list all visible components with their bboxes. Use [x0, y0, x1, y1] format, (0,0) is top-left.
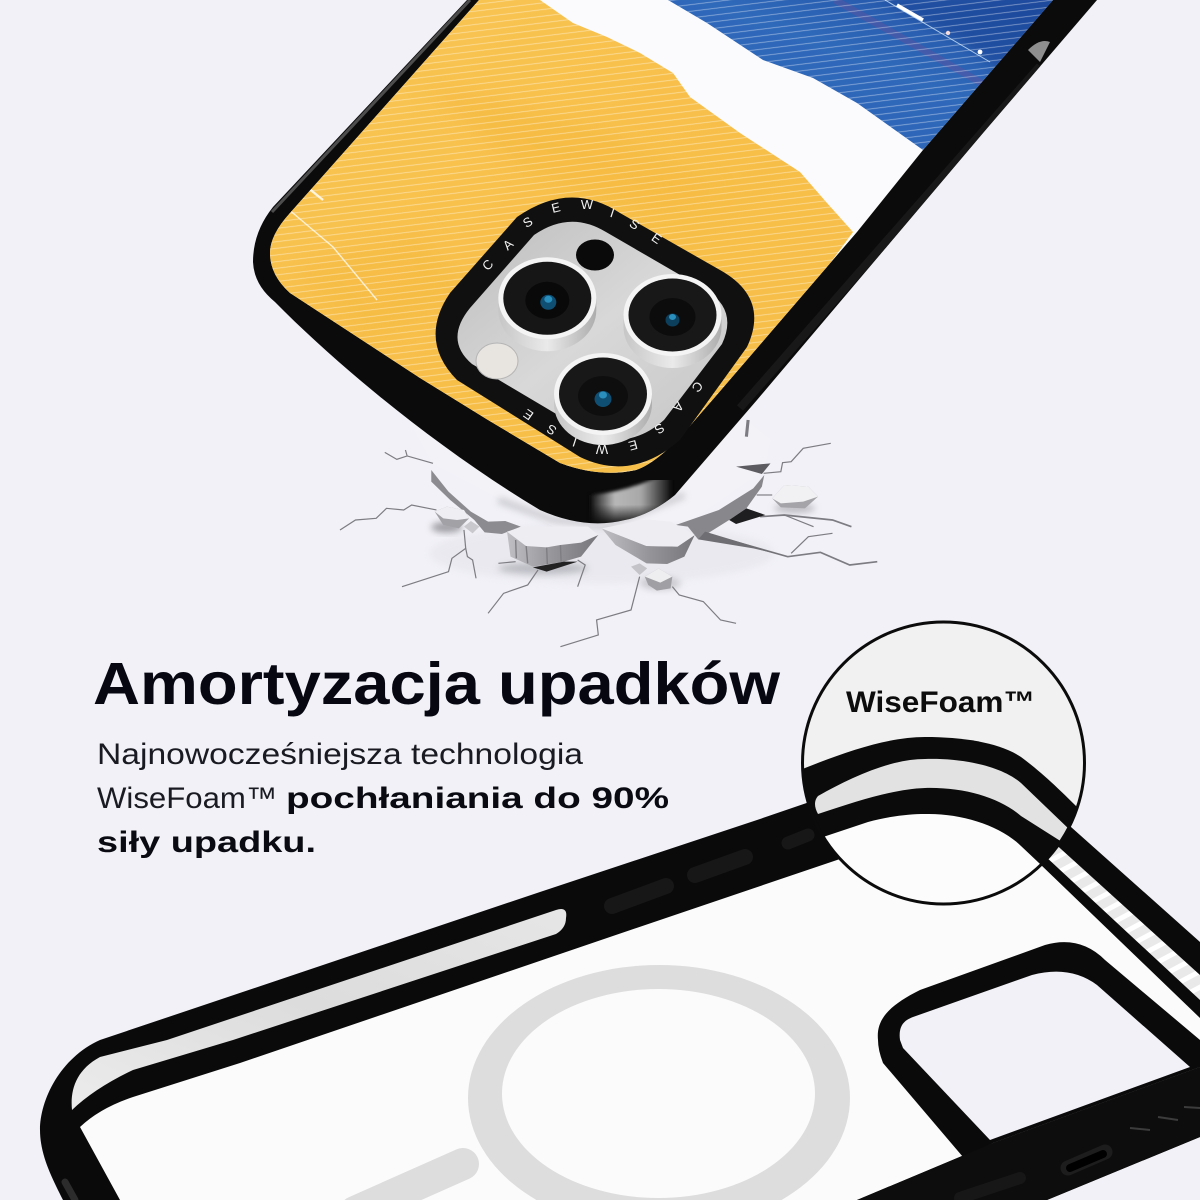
right edge slit	[1030, 830, 1200, 1000]
brand lettering top: E	[550, 199, 562, 216]
circle label: WiseFoam™	[846, 686, 1035, 719]
blue paint	[668, 0, 1060, 150]
body text	[97, 738, 669, 859]
body text: siły upadku.	[97, 826, 316, 859]
top phone in patterned case	[240, 0, 1100, 525]
clear back panel	[80, 836, 1200, 1200]
camera bumper ring	[436, 197, 754, 466]
brand lettering bottom: A	[670, 399, 687, 415]
brand lettering bottom	[520, 378, 706, 457]
case black bumper	[253, 0, 1097, 523]
rock chunk left	[507, 527, 598, 572]
rock chunk centre	[602, 519, 695, 564]
MagSafe pill mark	[355, 1164, 463, 1200]
fine stripe texture	[270, 0, 852, 473]
cracked ground impact illustration	[340, 420, 877, 647]
title: Amortyzacja upadków	[93, 651, 780, 717]
crack wall left	[431, 470, 521, 534]
camera cutout	[878, 942, 1200, 1157]
brand lettering top: S	[520, 213, 536, 231]
camera plate	[457, 222, 727, 440]
bottom clear case	[40, 780, 1200, 1200]
lens right	[624, 274, 722, 368]
brand lettering bottom: E	[627, 437, 639, 454]
crack wall right	[676, 475, 764, 539]
white brush strokes	[287, 208, 377, 300]
black frame	[40, 780, 1200, 1200]
body text: Najnowocześniejsza technologia	[97, 738, 583, 771]
side buttons top	[612, 835, 808, 906]
brand lettering top	[479, 197, 665, 273]
body text: WiseFoam™	[97, 782, 277, 815]
brand lettering top: I	[608, 205, 616, 220]
lens top left	[498, 257, 596, 351]
lens bottom	[554, 353, 652, 445]
brand lettering bottom: E	[520, 406, 536, 423]
MagSafe ring	[468, 965, 850, 1200]
brand lettering top: E	[649, 230, 665, 247]
bumper corner highlight	[272, 0, 1050, 525]
brand lettering bottom: W	[595, 442, 608, 457]
left edge slit	[72, 909, 566, 1110]
brand lettering top: W	[581, 197, 594, 212]
lower frame band	[857, 1067, 1200, 1200]
brand lettering bottom: I	[571, 435, 579, 450]
side switch and button bottom	[65, 1107, 1200, 1200]
brand lettering bottom: C	[689, 378, 706, 395]
brand lettering top: S	[627, 216, 642, 233]
brand lettering bottom: S	[651, 420, 667, 438]
brand lettering bottom: S	[544, 421, 559, 438]
lidar sensor	[576, 240, 614, 270]
circle fill	[802, 622, 1084, 904]
yellow paint	[270, 0, 853, 473]
circle outline	[802, 622, 1084, 904]
flash	[476, 343, 518, 379]
small rocks	[435, 485, 818, 591]
WiseFoam magnifier circle	[801, 620, 1086, 906]
back panel artwork	[270, 0, 1053, 473]
brand lettering top: C	[479, 256, 496, 273]
body text: pochłaniania do 90%	[286, 782, 669, 815]
brand lettering top: A	[500, 236, 516, 253]
magnified frame corner	[804, 737, 1076, 902]
